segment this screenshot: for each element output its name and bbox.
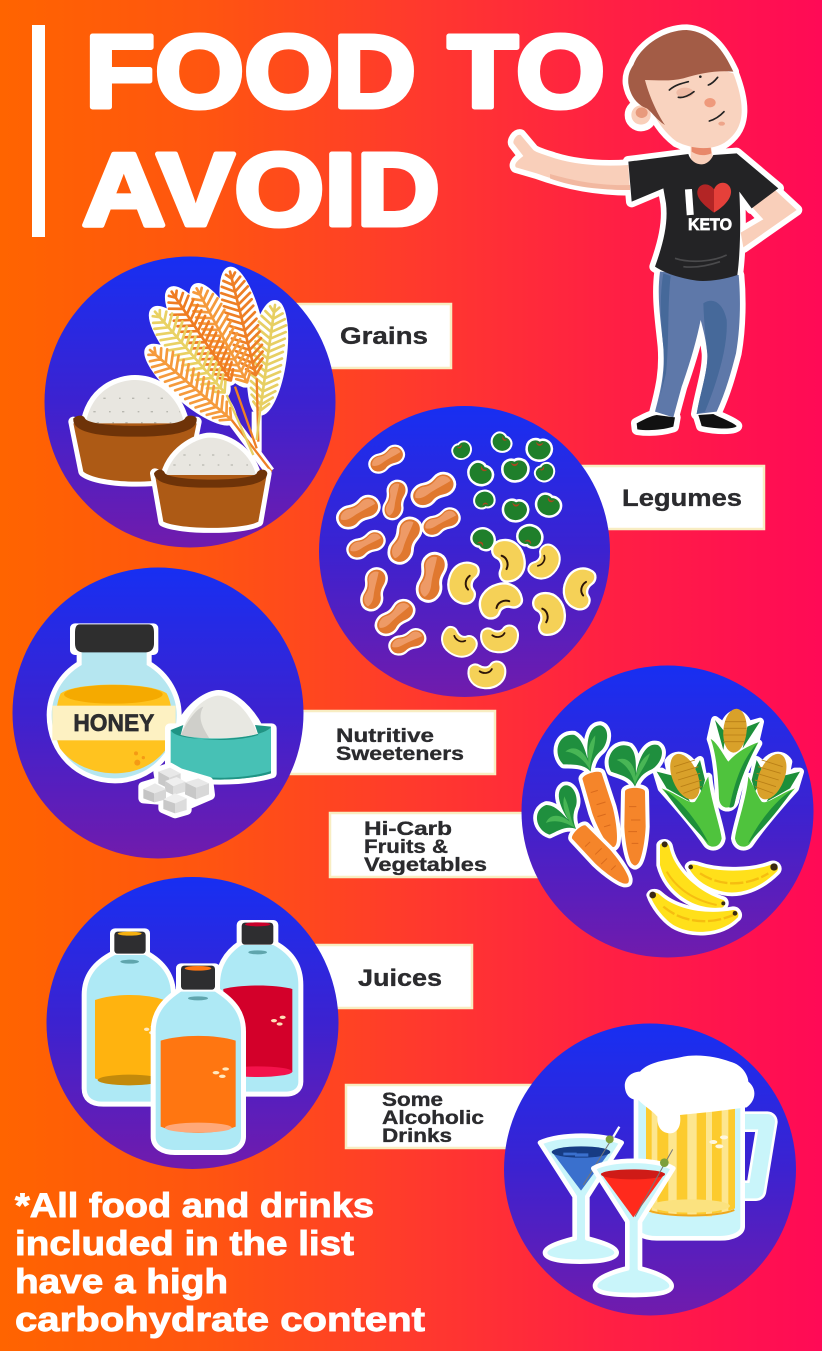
label: some alcoholic drinks: Drinks bbox=[382, 1126, 452, 1147]
panel: grains bbox=[44, 256, 336, 548]
label: some alcoholic drinks: Some bbox=[382, 1090, 443, 1111]
blue martini bbox=[540, 1127, 622, 1262]
shirt: I heart keto: I bbox=[683, 184, 695, 222]
title: FOOD TO bbox=[85, 14, 605, 129]
panel: legumes bbox=[319, 406, 610, 697]
label: juices: Juices bbox=[358, 965, 442, 992]
bowl of sugar bbox=[170, 695, 272, 780]
label: nutritive sweeteners: Nutritive bbox=[336, 726, 434, 747]
peanuts bbox=[335, 444, 461, 656]
green beans bbox=[451, 431, 562, 552]
panel: some alcoholic drinks bbox=[504, 1024, 796, 1316]
orange juice bottle bbox=[156, 966, 241, 1150]
label: some alcoholic drinks bbox=[346, 1085, 536, 1148]
sugar cubes bbox=[143, 768, 210, 813]
label: nutritive sweeteners bbox=[290, 711, 495, 774]
shirt: I heart keto bbox=[683, 183, 732, 234]
yellow juice bottle bbox=[87, 932, 171, 1102]
label: some alcoholic drinks: Alcoholic bbox=[382, 1108, 485, 1129]
title: AVOID bbox=[82, 132, 440, 247]
panel: hi-carb fruits and vegetables bbox=[522, 666, 814, 958]
carrots bbox=[530, 724, 662, 900]
yellow beans bbox=[438, 538, 598, 688]
footnote: carbohydrate content bbox=[15, 1301, 425, 1339]
bowl of grain front bbox=[154, 438, 267, 528]
footnote: included in the list bbox=[15, 1225, 354, 1263]
label: hi-carb fruits and vegetables bbox=[330, 813, 540, 877]
title bar bbox=[32, 25, 45, 237]
label: hi-carb fruits and vegetables: Fruits & bbox=[364, 837, 448, 858]
shirt: I heart keto: KETO bbox=[688, 215, 732, 234]
honey jar bbox=[52, 624, 177, 778]
title bbox=[82, 14, 605, 247]
panel: juices bbox=[46, 877, 338, 1169]
honey jar: HONEY bbox=[73, 710, 154, 737]
red juice bottle bbox=[220, 922, 298, 1092]
wheat stalks bbox=[136, 264, 293, 472]
label: nutritive sweeteners: Sweeteners bbox=[336, 744, 464, 765]
label: legumes: Legumes bbox=[622, 485, 742, 512]
label: hi-carb fruits and vegetables: Hi-Carb bbox=[364, 819, 452, 840]
label: juices bbox=[310, 945, 472, 1008]
character outline bbox=[513, 30, 797, 430]
bananas bbox=[649, 841, 778, 932]
beer mug bbox=[625, 1056, 767, 1238]
footnote: *All food and drinks bbox=[15, 1187, 374, 1225]
red martini bbox=[593, 1149, 673, 1295]
corn bbox=[657, 708, 800, 847]
bowl of grain bbox=[73, 380, 197, 482]
label: legumes bbox=[580, 466, 764, 529]
panel: nutritive sweeteners bbox=[12, 568, 304, 858]
label: hi-carb fruits and vegetables: Vegetables bbox=[364, 855, 487, 876]
footnote: have a high bbox=[15, 1263, 228, 1301]
footnote bbox=[15, 1187, 425, 1339]
label: grains bbox=[290, 304, 451, 368]
label: grains: Grains bbox=[340, 323, 428, 350]
character: man with I love keto shirt bbox=[513, 30, 797, 430]
